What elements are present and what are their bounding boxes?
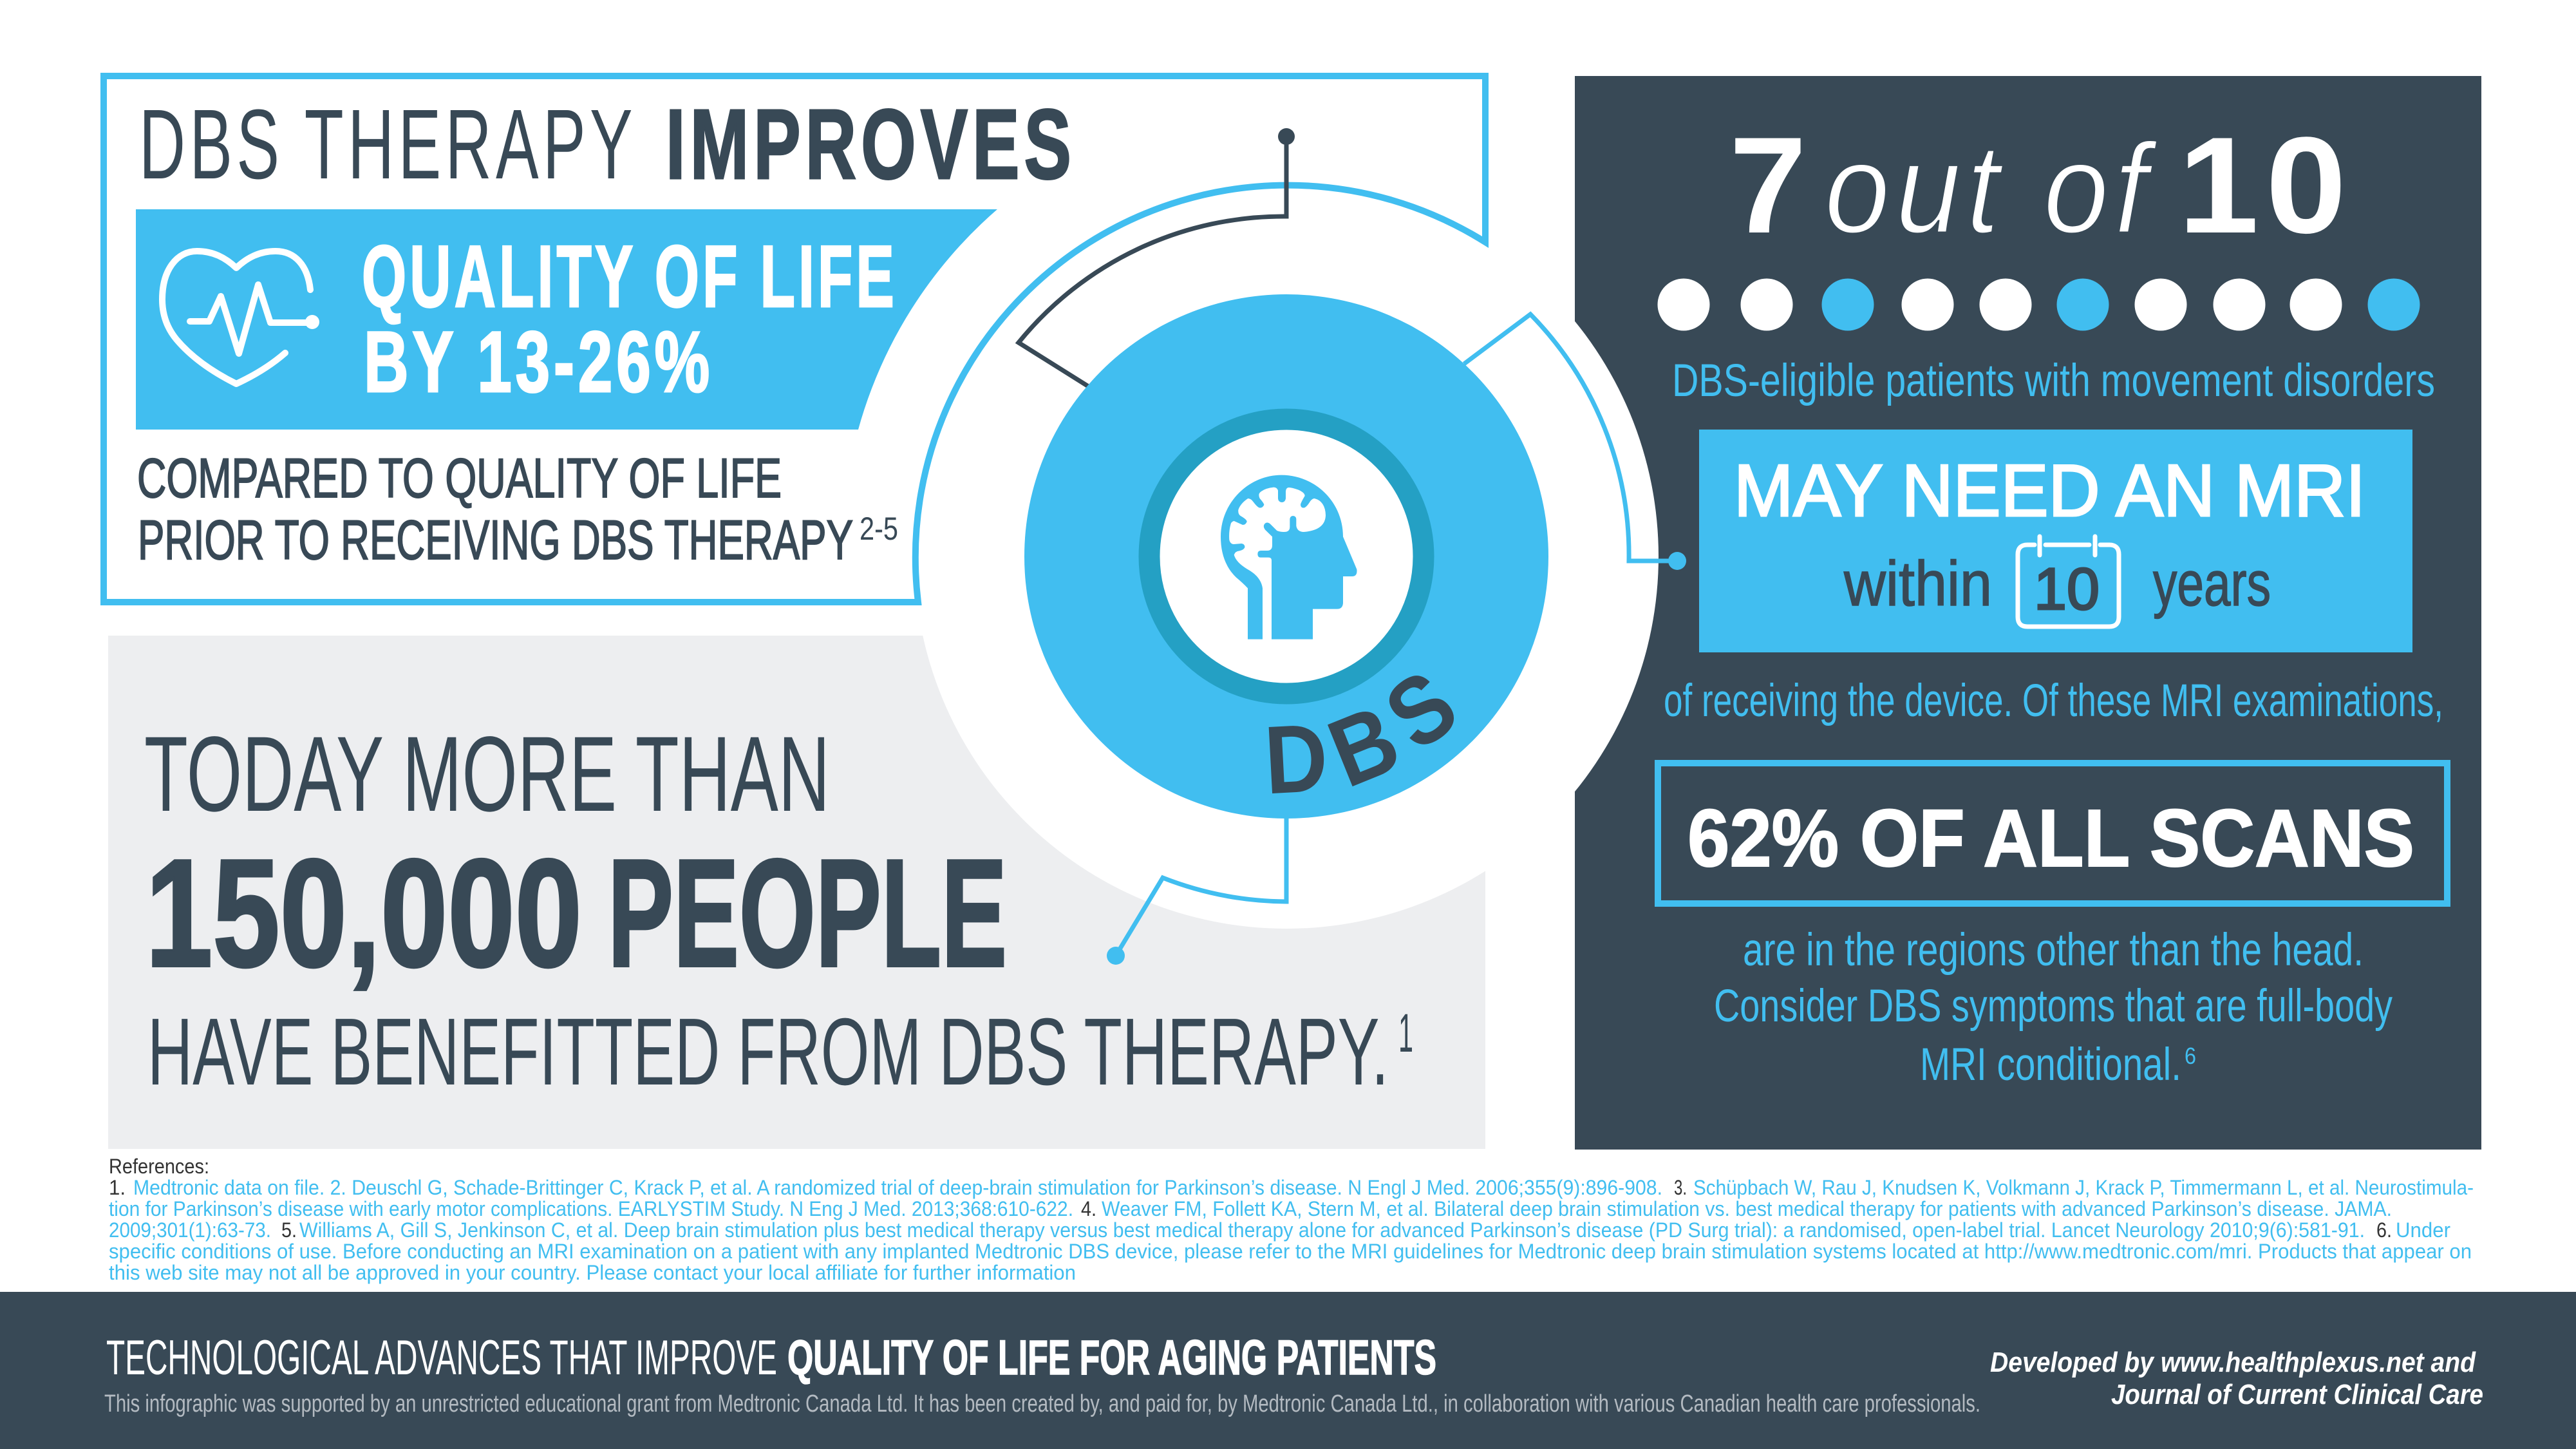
- text: 150,000 people: 150,000: [146, 828, 582, 999]
- panel: grey statistic background: [108, 636, 1485, 1149]
- footer heading: TECHNOLOGICAL ADVANCES THAT IMPROVE: [106, 1331, 777, 1385]
- connector: dark arc to upper dot: [1019, 128, 1295, 390]
- connector: blue arc to people statistic: [1107, 817, 1286, 965]
- references: Williams A, Gill S, Jenkinson C, et al. Deep brain stimulation plus best medical therapy versus best medical therapy alone for advanced Parkinson’s disease (PD Surg trial): a randomised, open-label trial. Lancet Neurology 2010;9(6):581-91.: [299, 1218, 2365, 1242]
- references: 1.: [109, 1176, 126, 1199]
- dot row: 7 white of 10: [1657, 278, 2420, 331]
- footer band: [0, 1292, 2576, 1449]
- white central disc: [914, 184, 1659, 929]
- panel: dark MRI background: [1575, 76, 2481, 1150]
- footer credit: [1990, 1347, 2483, 1410]
- icon: calendar: [2018, 536, 2119, 627]
- heading: 7 out of 10: 7: [1729, 109, 1807, 262]
- text: 1: [1398, 1003, 1413, 1063]
- references: 3.: [1674, 1176, 1687, 1199]
- footer heading: QUALITY OF LIFE FOR AGING PATIENTS: [787, 1331, 1436, 1385]
- text: quality of life: QUALITY OF LIFE: [362, 227, 898, 325]
- text: 150,000 people: [146, 828, 1007, 999]
- callout: may need an MRI within 10 years: [1699, 430, 2412, 652]
- text: by 13-26%: BY 13-26%: [364, 314, 713, 410]
- curved label: DBS: [1262, 649, 1476, 815]
- text: other regions and MRI conditional: Consider DBS symptoms that are full-body: [1714, 981, 2393, 1032]
- references: Under: [2396, 1218, 2450, 1242]
- text: today more than: TODAY MORE THAN: [144, 715, 830, 834]
- curved label: DBS: S: [1366, 649, 1476, 770]
- text: other regions and MRI conditional: are in the regions other than the head.: [1743, 925, 2364, 976]
- text: compared to quality of life prior to receiving DBS therapy: [137, 448, 898, 571]
- references: Schüpbach W, Rau J, Knudsen K, Volkmann J, Krack P, Timmermann L, et al. Neurostimula-: [1693, 1176, 2474, 1199]
- footer credit: Developed by www.healthplexus.net and: [1990, 1347, 2476, 1378]
- callout: 62% of all scans: 62% OF ALL SCANS: [1688, 793, 2414, 884]
- references: 6.: [2376, 1218, 2392, 1242]
- text: other regions and MRI conditional: MRI conditional.: [1920, 1039, 2181, 1090]
- text: have benefitted from DBS therapy: [147, 999, 1413, 1105]
- callout: 62% of all scans: [1658, 763, 2447, 904]
- connector: blue arc to MRI box: [1464, 314, 1686, 570]
- references: specific conditions of use. Before conducting an MRI examination on a patient with any implanted Medtronic DBS device, please refer to the MRI guidelines for Medtronic deep brain stimulation systems located at http://www.medtronic.com/mri. Products that appear on: [109, 1240, 2472, 1263]
- references: this web site may not all be approved in your country. Please contact your local affiliate for further information: [109, 1261, 1076, 1284]
- references: 5.: [281, 1218, 297, 1242]
- heading: DBS therapy improves: IMPROVES: [666, 89, 1076, 200]
- text: have benefitted from DBS therapy: HAVE BENEFITTED FROM DBS THERAPY.: [147, 999, 1389, 1105]
- references: 2009;301(1):63-73.: [109, 1218, 271, 1242]
- curved label: DBS: B: [1315, 685, 1413, 808]
- text block: 150,000 people: [144, 715, 1413, 1105]
- icon: heart with pulse: [162, 251, 319, 384]
- central DBS circle: [1024, 294, 1548, 819]
- text: compared to quality of life prior to receiving DBS therapy: COMPARED TO QUALITY OF LIFE: [137, 448, 782, 509]
- references: Weaver FM, Follett KA, Stern M, et al. Bilateral deep brain stimulation vs. best medical therapy for patients with advanced Parkinson’s disease. JAMA.: [1102, 1197, 2392, 1220]
- text: other regions and MRI conditional: [1714, 925, 2393, 1090]
- references: Medtronic data on file. 2. Deuschl G, Schade-Brittinger C, Krack P, et al. A randomized trial of deep-brain stimulation for Parkinson’s disease. N Engl J Med. 2006;355(9):896-908.: [133, 1176, 1662, 1199]
- text: other regions and MRI conditional: 6: [2185, 1043, 2196, 1069]
- footer credit: Journal of Current Clinical Care: [2111, 1379, 2483, 1410]
- references: References:: [109, 1155, 209, 1178]
- references: 4.: [1081, 1197, 1096, 1220]
- heading: DBS therapy improves: DBS THERAPY: [139, 89, 637, 200]
- callout: may need an MRI within 10 years: MAY NEED AN MRI: [1734, 450, 2365, 532]
- text: 150,000 people: PEOPLE: [608, 828, 1007, 999]
- icon: head with brain: [1221, 475, 1357, 639]
- footer disclosure: This infographic was supported by an unrestricted educational grant from Medtronic Canada Ltd. It has been created by, and paid for, by Medtronic Canada Ltd., in collaboration with various Canadian health care professionals.: [104, 1390, 1980, 1417]
- text: compared to quality of life prior to receiving DBS therapy: PRIOR TO RECEIVING DBS THERAPY: [138, 509, 853, 571]
- curved label: DBS: D: [1262, 704, 1330, 815]
- panel content: 7 out of 10: [1657, 109, 2447, 1090]
- ribbon: quality of life by 13-26%: [136, 209, 997, 430]
- text: compared to quality of life prior to receiving DBS therapy: 2-5: [860, 511, 898, 547]
- heading: 7 out of 10: out of: [1825, 117, 2158, 260]
- callout: may need an MRI within 10 years: within: [1843, 548, 1992, 619]
- references: [109, 1155, 2474, 1284]
- callout: may need an MRI within 10 years: years: [2153, 548, 2271, 619]
- heading: 7 out of 10: 10: [2178, 109, 2353, 262]
- references: tion for Parkinson’s disease with early motor complications. EARLYSTIM Study. N Eng J Med. 2013;368:610-622.: [109, 1197, 1073, 1220]
- panel: quality of life frame: [104, 76, 1485, 602]
- heading: 7 out of 10: [1729, 109, 2353, 262]
- callout: may need an MRI within 10 years: 10: [2034, 556, 2100, 622]
